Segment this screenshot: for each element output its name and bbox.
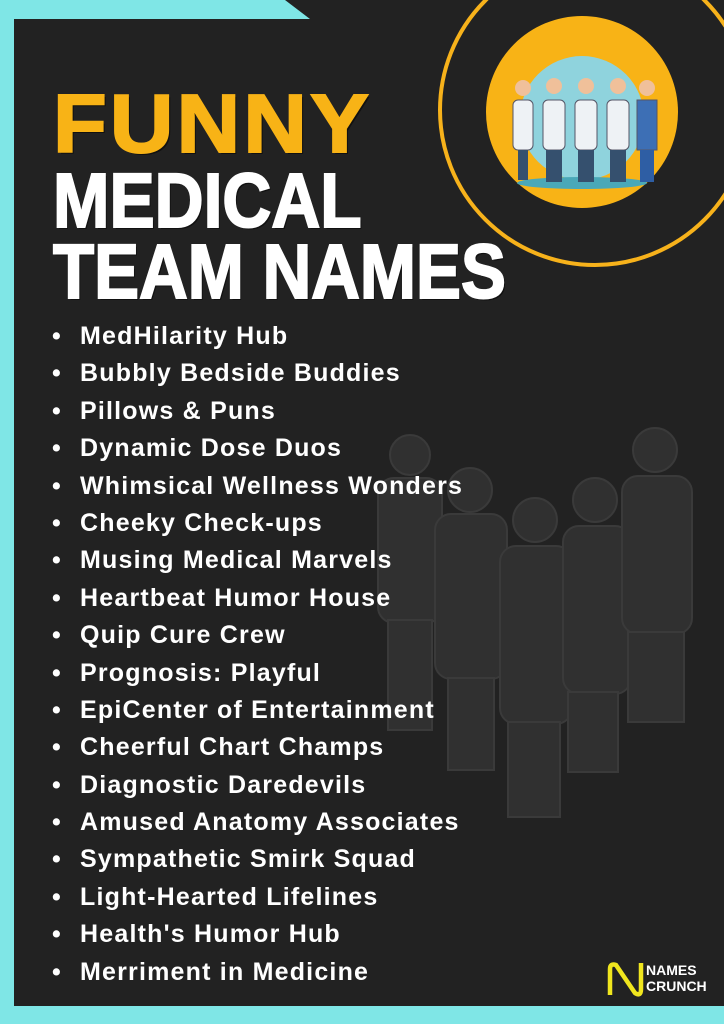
list of names: Whimsical Wellness Wonders [80,472,463,500]
list of names: Cheeky Check-ups [80,509,323,537]
ring arc [440,0,724,265]
list of names: MedHilarity Hub [80,322,288,350]
list of names: Cheerful Chart Champs [80,733,384,761]
silhouettes [378,428,692,817]
logo: Names Crunch [608,962,707,997]
list of names: Amused Anatomy Associates [80,808,460,836]
list of names: Merriment in Medicine [80,958,369,986]
list of names: Pillows & Puns [80,397,276,425]
list of names: Dynamic Dose Duos [80,434,342,462]
title: MEDICAL [53,158,362,244]
list of names: EpiCenter of Entertainment [80,696,435,724]
list of names: Light-Hearted Lifelines [80,883,378,911]
title: FUNNY [53,77,372,170]
list of names [52,322,463,986]
list of names: Bubbly Bedside Buddies [80,359,401,387]
list of names: Diagnostic Daredevils [80,771,366,799]
title [52,77,506,315]
logo: Names Crunch: CRUNCH [646,978,707,994]
list of names: Sympathetic Smirk Squad [80,845,416,873]
list of names: Musing Medical Marvels [80,546,393,574]
title: TEAM NAMES [53,229,506,315]
list of names: Quip Cure Crew [80,621,286,649]
logo: Names Crunch: NAMES [646,962,697,978]
list of names: Health's Humor Hub [80,920,341,948]
icon: yellow circle with medical team [486,16,678,208]
list of names: Prognosis: Playful [80,659,321,687]
list of names: Heartbeat Humor House [80,584,391,612]
